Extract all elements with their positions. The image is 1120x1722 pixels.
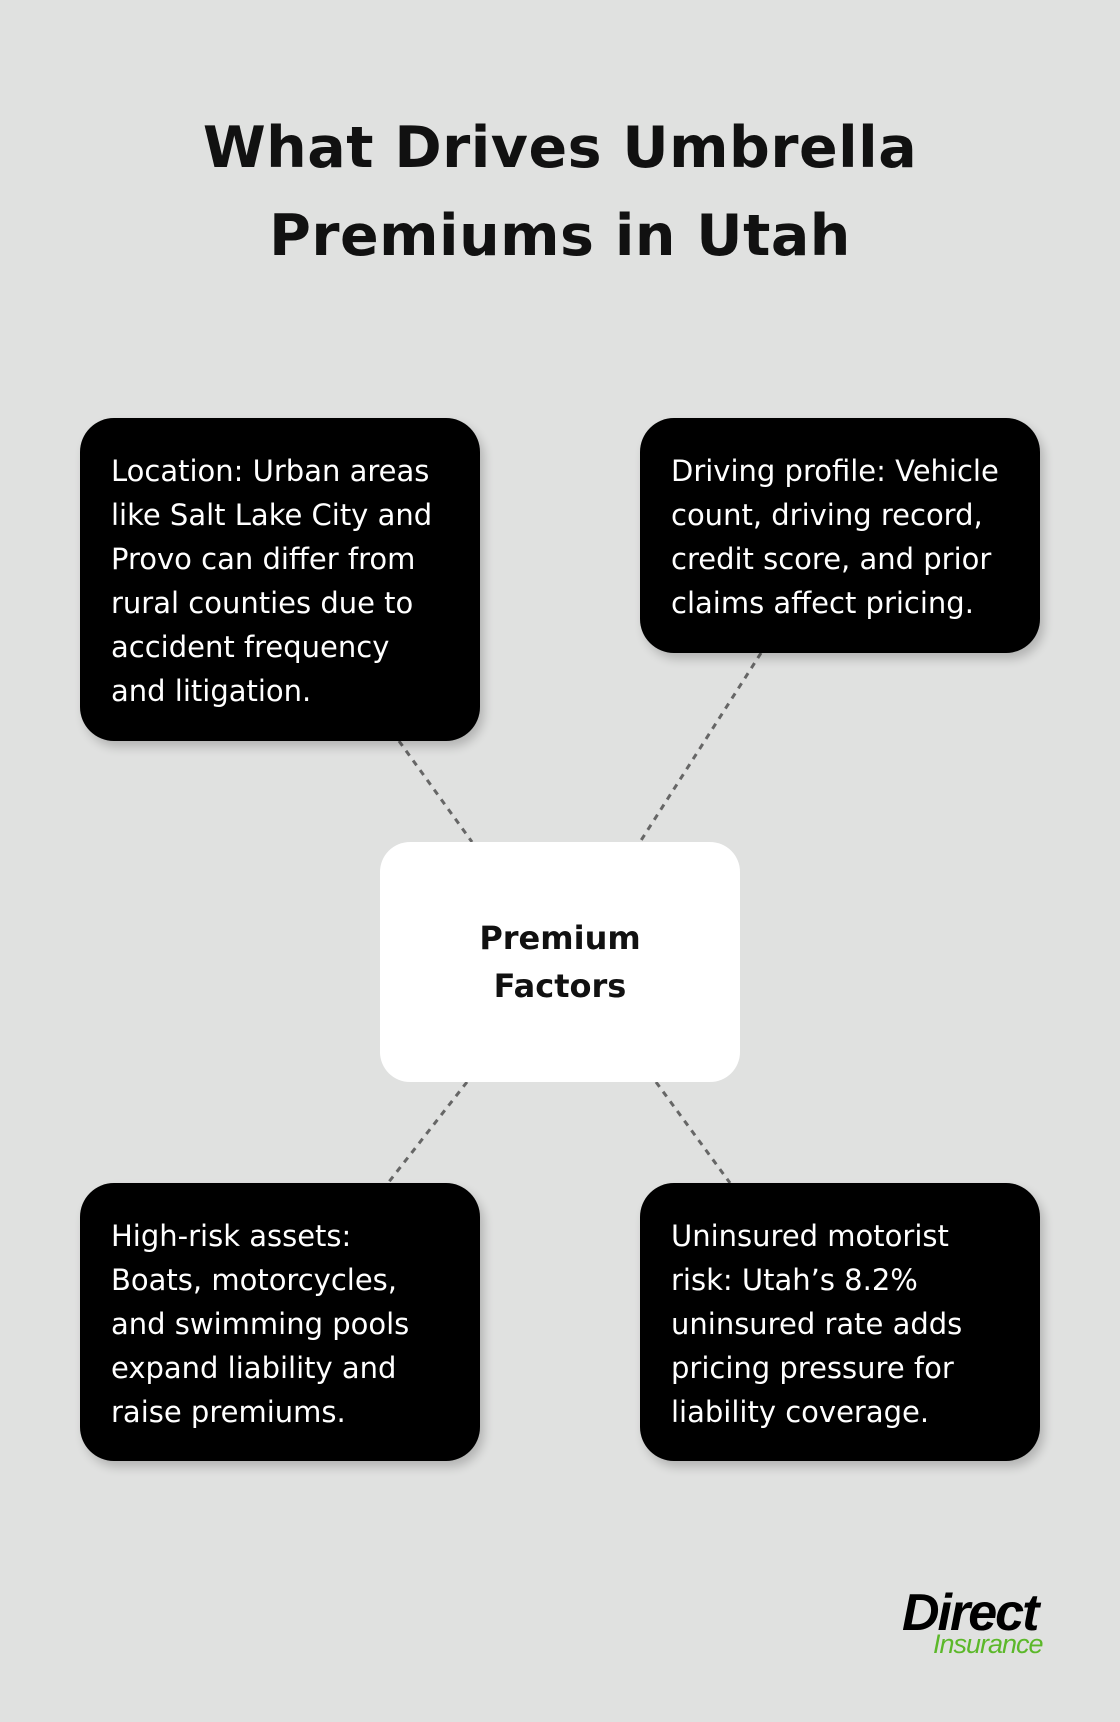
title [203, 115, 917, 269]
panel: driving profile: count, driving record, [671, 498, 983, 532]
center node [380, 842, 740, 1082]
logo: Insurance [933, 1629, 1043, 1659]
panel: uninsured motorist: liability coverage. [671, 1395, 929, 1429]
panel: driving profile: credit score, and prior [671, 542, 991, 576]
panel: location: rural counties due to [111, 586, 413, 620]
title: What Drives Umbrella [203, 115, 917, 181]
panel: uninsured motorist: pricing pressure for [671, 1351, 954, 1385]
panel: high-risk assets: Boats, motorcycles, [111, 1263, 397, 1297]
panel: location: Provo can differ from [111, 542, 415, 576]
panel: uninsured motorist: Uninsured motorist [671, 1219, 949, 1253]
panel: high-risk assets: High-risk assets: [111, 1219, 351, 1253]
panel: high-risk assets: expand liability and [111, 1351, 396, 1385]
panel: location: Location: Urban areas [111, 454, 429, 488]
panel: location [80, 418, 480, 741]
panel: location: accident frequency [111, 630, 389, 664]
panel: driving profile [640, 418, 1040, 653]
panel: uninsured motorist [640, 1183, 1040, 1461]
center node: Factors [494, 967, 626, 1005]
center node: Premium [479, 919, 641, 957]
panel: driving profile: Driving profile: Vehicle [671, 454, 999, 488]
panel: high-risk assets: and swimming pools [111, 1307, 409, 1341]
panel: high-risk assets: raise premiums. [111, 1395, 346, 1429]
panel: uninsured motorist: uninsured rate adds [671, 1307, 962, 1341]
panel: location: and litigation. [111, 674, 311, 708]
logo: Direct [902, 1584, 1037, 1642]
panel: location: like Salt Lake City and [111, 498, 432, 532]
title: Premiums in Utah [269, 203, 851, 269]
panel: uninsured motorist: risk: Utah’s 8.2% [671, 1263, 918, 1297]
panel: driving profile: claims affect pricing. [671, 586, 974, 620]
panel: high-risk assets [80, 1183, 480, 1461]
